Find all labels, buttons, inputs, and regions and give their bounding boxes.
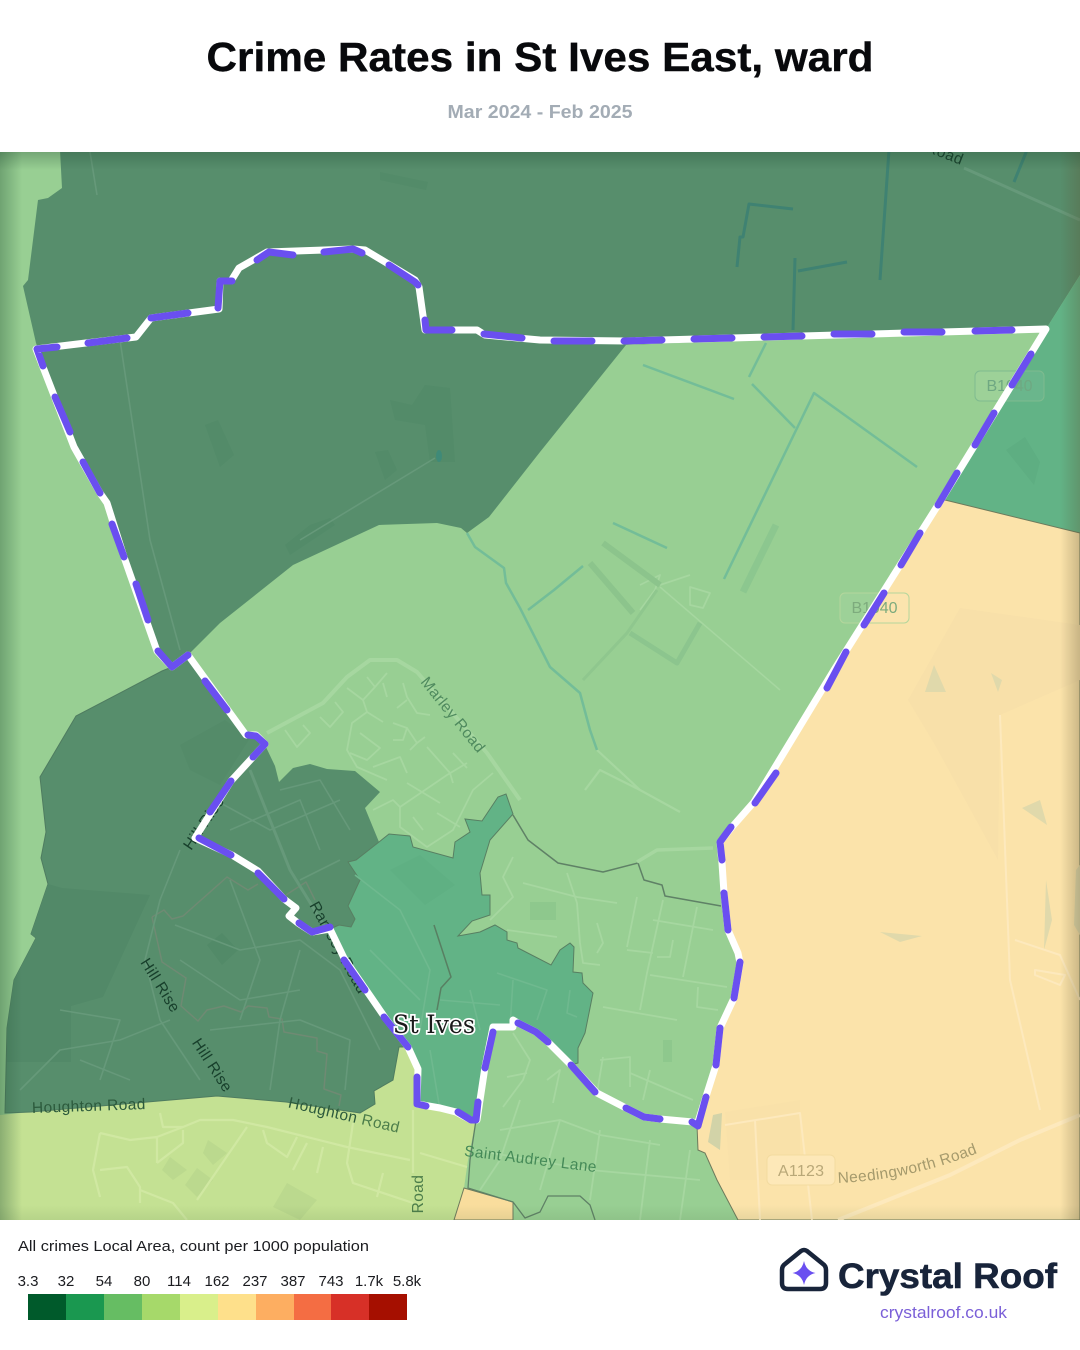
road labels: Road bbox=[924, 139, 966, 169]
legend colour bar bbox=[28, 1294, 407, 1320]
road shield: A1123 bbox=[767, 1155, 835, 1185]
road shield: A1123: A1123 bbox=[778, 1163, 824, 1180]
logo: Crystal Roof bbox=[782, 1250, 1057, 1322]
road labels: Hill Rise bbox=[180, 794, 228, 853]
road labels: Houghton Road bbox=[287, 1095, 401, 1137]
subtitle: date range: Mar 2024 - Feb 2025 bbox=[448, 101, 632, 122]
road labels: Needingworth Road bbox=[838, 1143, 976, 1183]
road shield: B1040 north: B1040 bbox=[986, 378, 1033, 395]
region: small peach south bbox=[454, 1188, 513, 1220]
road network: light green bbox=[267, 575, 780, 1220]
legend scale labels: 162 bbox=[204, 1273, 230, 1290]
road labels: Hill Rise bbox=[188, 1036, 235, 1096]
ward boundary: white base line bbox=[36, 249, 1046, 1125]
icon: house with star bbox=[782, 1250, 826, 1289]
place label: St Ives: St Ives bbox=[393, 1010, 475, 1039]
logo wordmark: Crystal Roof bbox=[838, 1257, 1057, 1296]
legend title: All crimes Local Area, count per 1000 population bbox=[18, 1238, 369, 1255]
region: dark green north bbox=[23, 150, 1080, 667]
road labels: Marley Road bbox=[417, 674, 488, 756]
legend scale labels: 3.3 bbox=[18, 1273, 38, 1290]
land patches bbox=[7, 625, 1080, 1220]
road network: lime bbox=[93, 1110, 467, 1220]
legend scale labels: 1.7k bbox=[355, 1273, 384, 1290]
region: mid green St Ives centre bbox=[330, 794, 593, 1120]
region: dark green south west bbox=[5, 655, 408, 1113]
legend bbox=[18, 1238, 422, 1320]
ward boundary: purple dashes bbox=[37, 249, 1031, 1126]
road labels: Road bbox=[410, 1175, 427, 1213]
region: peach east bbox=[697, 500, 1080, 1220]
legend scale labels: 32 bbox=[58, 1273, 74, 1290]
road shield: B1040 south bbox=[840, 593, 909, 623]
legend scale labels: 743 bbox=[318, 1273, 344, 1290]
road labels bbox=[33, 152, 1016, 1212]
legend scale labels: 114 bbox=[167, 1273, 191, 1290]
legend scale labels: 80 bbox=[134, 1273, 150, 1290]
road network: mid green bbox=[355, 875, 577, 1110]
road shield: B1040 north bbox=[975, 371, 1044, 401]
road labels: Hill Rise bbox=[137, 955, 183, 1016]
road network: dark green bbox=[20, 152, 1080, 1090]
region: dark green centre bbox=[195, 745, 380, 932]
region outlines bbox=[152, 815, 721, 1220]
road network: peach bbox=[725, 715, 1080, 1220]
legend scale labels: 54 bbox=[96, 1273, 112, 1290]
region: mid green north east bbox=[945, 275, 1080, 533]
legend scale labels: 5.8k bbox=[393, 1273, 422, 1290]
waterways bbox=[467, 150, 1027, 750]
road labels: Houghton Road bbox=[32, 1096, 146, 1117]
pond bbox=[436, 450, 442, 462]
legend scale labels: 237 bbox=[242, 1273, 268, 1290]
map base: light green area bbox=[0, 152, 1080, 1220]
map edge shading bbox=[0, 152, 1080, 1220]
road labels: Saint Audrey Lane bbox=[463, 1143, 598, 1176]
region: lime south bbox=[0, 1047, 476, 1220]
title: Crime Rates in St Ives East, ward bbox=[206, 34, 874, 80]
website url: crystalroof.co.uk bbox=[880, 1304, 1008, 1322]
legend scale labels bbox=[18, 1273, 422, 1290]
road shield: B1040 south: B1040 bbox=[852, 600, 898, 617]
road labels: Ramsey Road bbox=[306, 899, 370, 997]
legend scale labels: 387 bbox=[280, 1273, 306, 1290]
